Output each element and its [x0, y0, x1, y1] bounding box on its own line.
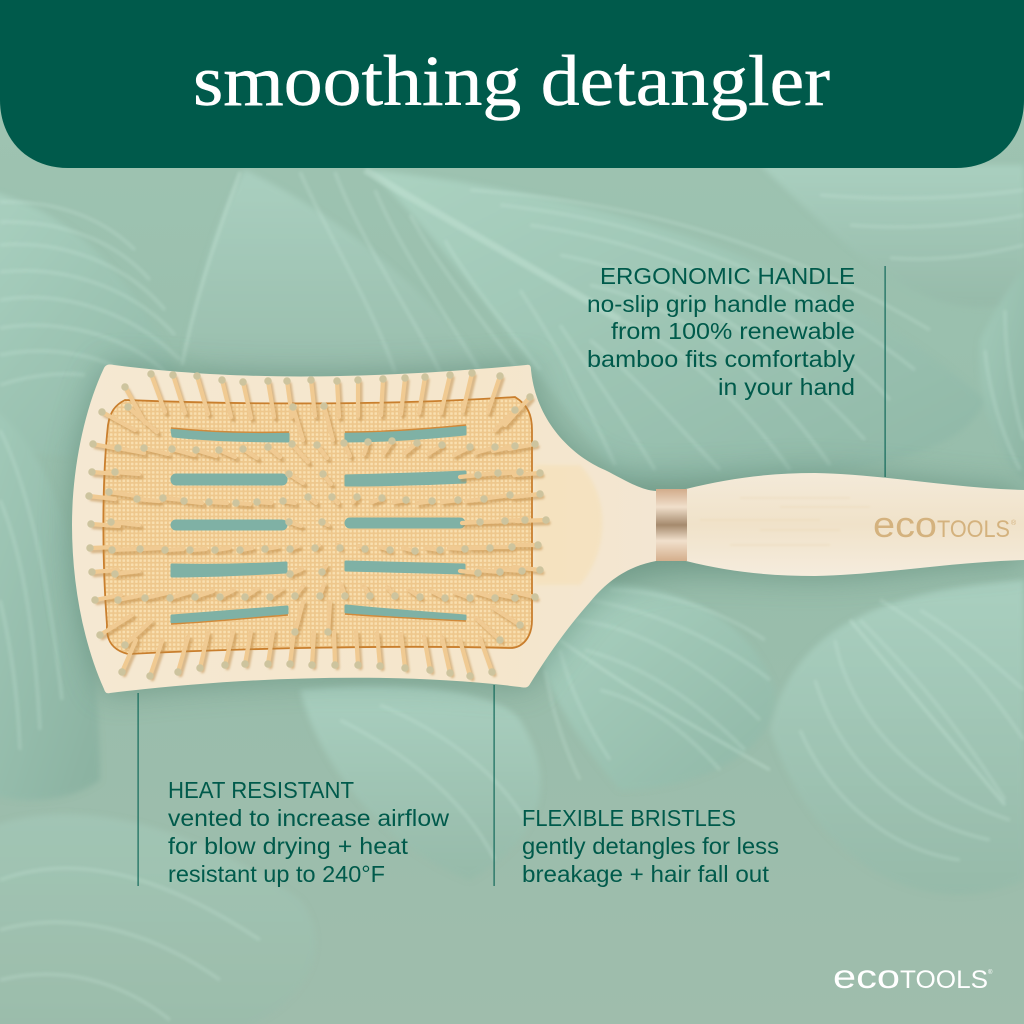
description: no-slip grip handle made	[587, 291, 855, 317]
air vents	[172, 427, 465, 622]
description	[168, 805, 449, 887]
handle logo: ®	[1011, 519, 1017, 527]
header banner	[0, 0, 1024, 168]
handle logo	[873, 504, 1017, 545]
handle logo: TOOLS	[937, 516, 1010, 543]
handle wood grain	[700, 498, 870, 545]
bristle pins	[89, 373, 548, 679]
leader line	[884, 266, 886, 477]
brand logo: eco	[833, 958, 900, 995]
vent inner edges	[171, 425, 466, 624]
heading: ERGONOMIC HANDLE	[600, 263, 855, 289]
description: in your hand	[718, 374, 855, 400]
handle	[686, 473, 1024, 576]
handle logo: eco	[873, 504, 937, 545]
heading: HEAT RESISTANT	[168, 777, 354, 803]
heading: FLEXIBLE BRISTLES	[522, 805, 736, 831]
metal band	[656, 489, 687, 561]
leader line	[494, 685, 495, 886]
brand logo: TOOLS	[900, 966, 988, 994]
description	[587, 291, 856, 400]
callout: ergonomic handle	[587, 263, 886, 477]
description: breakage + hair fall out	[522, 861, 770, 887]
description: from 100% renewable	[611, 318, 855, 344]
bristle tips	[89, 373, 546, 676]
bamboo grain patch	[535, 465, 602, 585]
bristle pad	[103, 397, 532, 654]
description: vented to increase airflow	[168, 805, 449, 831]
brand logo: ®	[988, 969, 993, 976]
hairbrush	[72, 364, 1024, 693]
callout: heat resistant	[138, 693, 449, 887]
brush shadow on leaves	[72, 365, 1024, 693]
description: for blow drying + heat	[168, 833, 409, 859]
brush head	[72, 364, 656, 693]
leader line	[138, 693, 139, 886]
description: resistant up to 240°F	[168, 861, 385, 887]
description: bamboo fits comfortably	[587, 346, 856, 372]
description	[522, 833, 779, 887]
brand logo	[833, 958, 993, 995]
title: smoothing detangler	[193, 41, 830, 121]
description: gently detangles for less	[522, 833, 779, 859]
callout: flexible bristles	[494, 685, 779, 887]
